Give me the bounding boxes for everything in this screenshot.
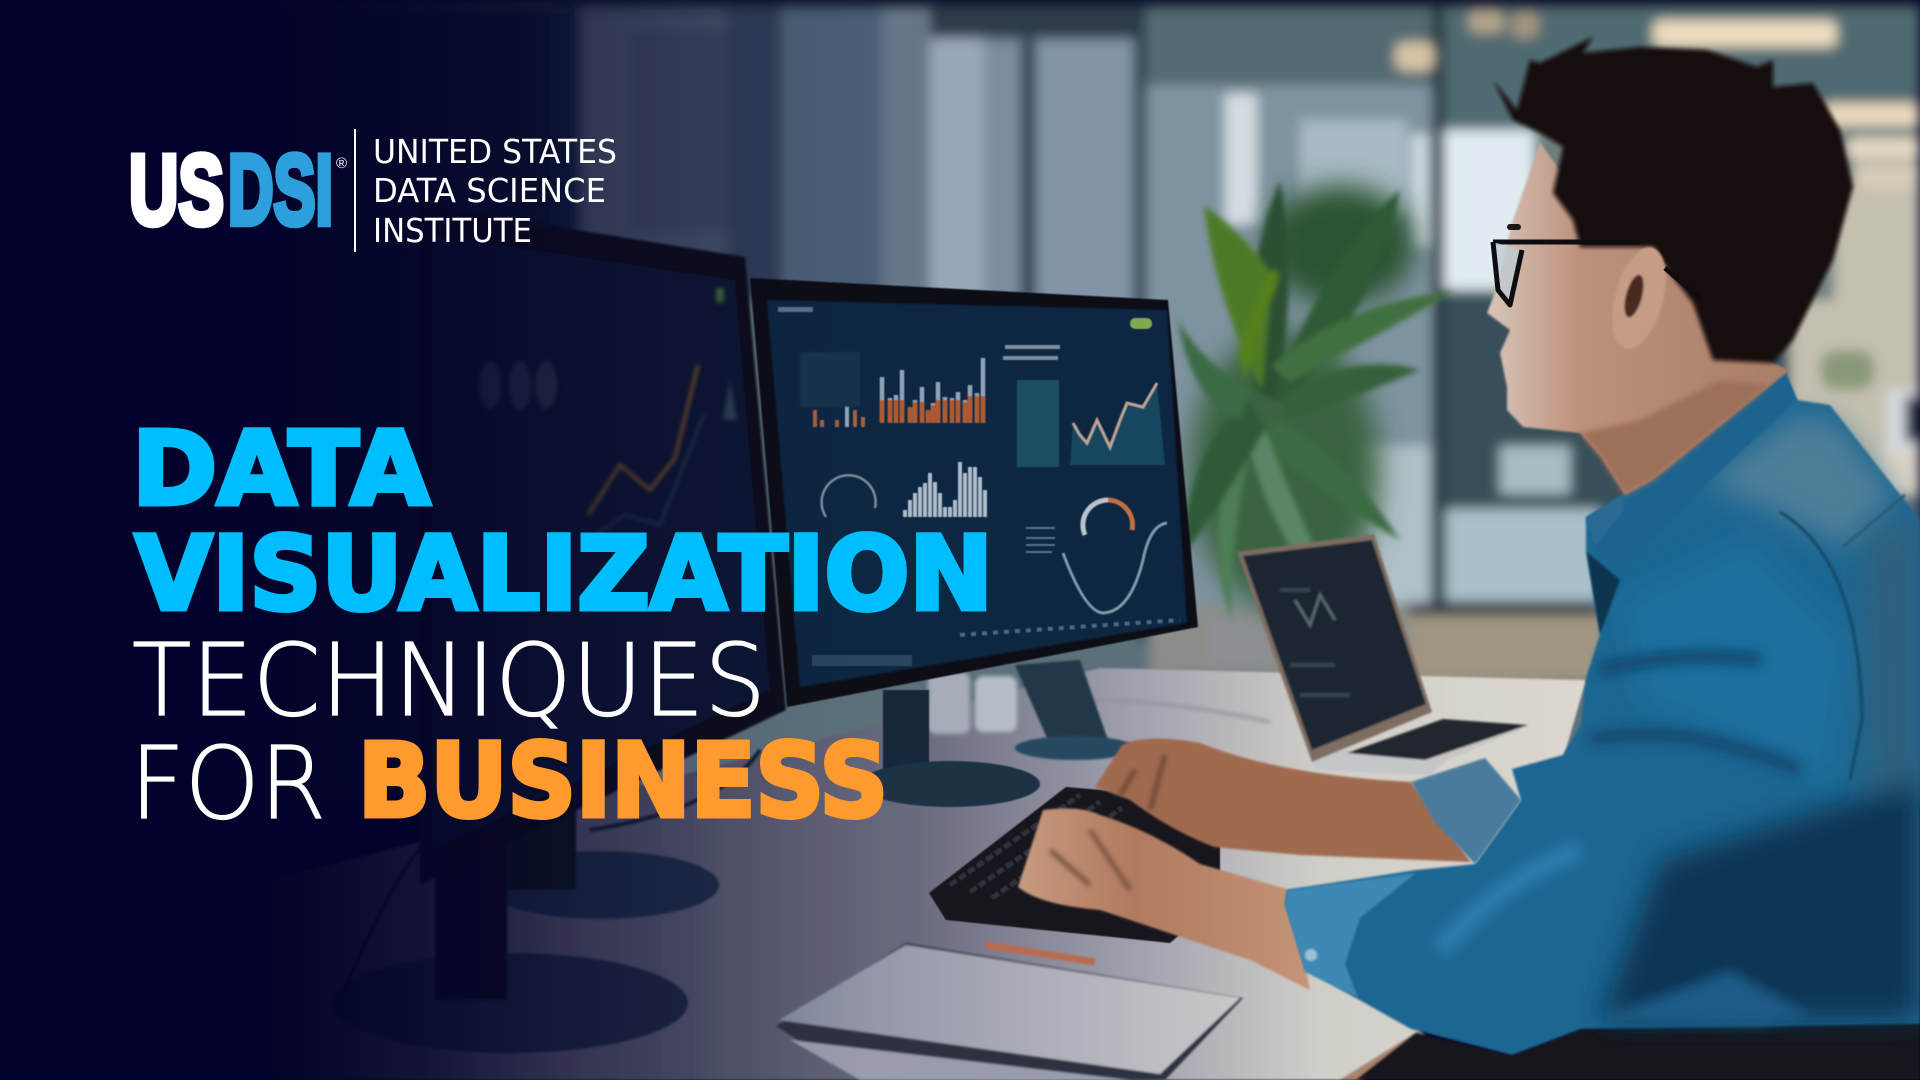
far forearm and hand: [1095, 738, 1471, 862]
title line: FOR: FOR: [130, 725, 326, 842]
logo divider: [354, 129, 356, 252]
logo wordmark USDSI: [129, 134, 333, 245]
logo name: [373, 132, 617, 250]
trousers and chair: [1356, 1020, 1920, 1080]
near sleeve cuff: [1285, 873, 1416, 998]
logo name: DATA SCIENCE: [373, 171, 606, 210]
eyebrow: [1507, 224, 1521, 230]
shirt folds: [1440, 657, 1810, 1025]
person: [1018, 37, 1920, 1080]
shirt: [1285, 367, 1920, 1055]
left monitor charts: [479, 288, 737, 540]
dashboard charts: [778, 307, 1180, 666]
shirt shading: [1600, 415, 1920, 1020]
logo wordmark USDSI: US: [129, 134, 224, 245]
neck and face: [1487, 143, 1790, 495]
far sleeve cuff: [1411, 758, 1521, 864]
logo name: INSTITUTE: [373, 211, 532, 250]
logo wordmark USDSI: DSI: [228, 134, 333, 245]
logo: [129, 129, 617, 252]
shirt collar and seams: [1586, 367, 1905, 780]
cups on desk: [928, 672, 1270, 734]
keyboard: [929, 787, 1220, 943]
left monitor: [332, 205, 786, 1053]
ear: [1602, 242, 1676, 354]
near forearm and hand: [1018, 808, 1310, 990]
centre monitor stand: [860, 690, 1040, 807]
left monitor stand and bases: [332, 750, 760, 1053]
logo name: UNITED STATES: [373, 132, 617, 171]
title line: VISUALIZATION: VISUALIZATION: [135, 515, 993, 634]
plant leaves: [1178, 180, 1453, 620]
office background: [0, 0, 1920, 800]
hair: [1493, 37, 1853, 363]
title: [130, 410, 993, 842]
title line: TECHNIQUES: TECHNIQUES: [132, 622, 766, 739]
small stand behind centre monitor: [1015, 660, 1135, 760]
notebook and pencil: [776, 943, 1243, 1080]
glasses: [1493, 242, 1702, 305]
plant foliage mass: [1190, 185, 1415, 610]
centre monitor: [750, 278, 1198, 707]
laptop: [1237, 534, 1530, 820]
desk: [270, 668, 1586, 1080]
title line: BUSINESS: BUSINESS: [358, 722, 888, 841]
registered mark: ®: [336, 155, 347, 172]
plant: [1178, 180, 1453, 620]
title line: DATA: DATA: [132, 410, 430, 529]
